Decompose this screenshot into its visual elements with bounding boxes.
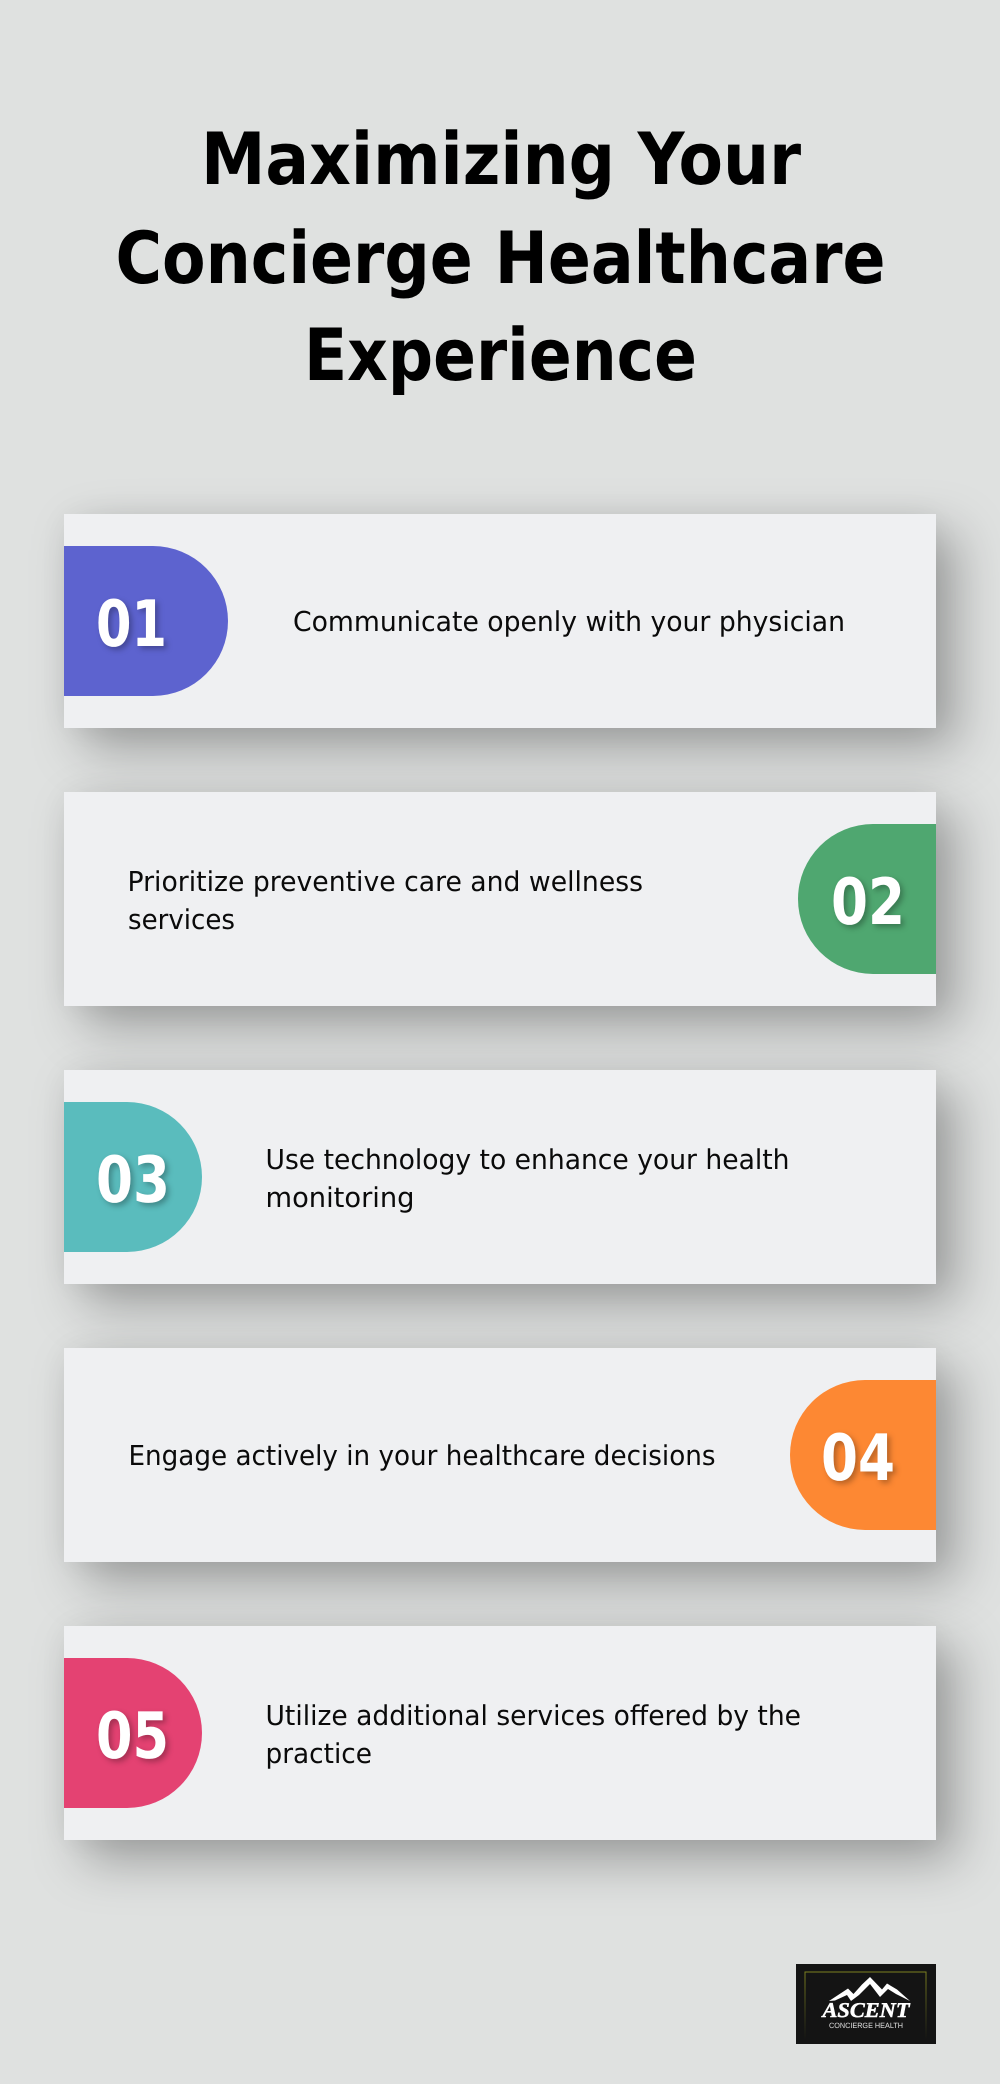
text 05: practice	[266, 1739, 372, 1770]
number 02: 02	[831, 866, 905, 940]
title	[116, 117, 886, 397]
panel: step 04	[64, 1348, 936, 1562]
badge 05	[64, 1658, 202, 1808]
text 02: services	[128, 905, 235, 936]
number 04: 04	[821, 1422, 895, 1496]
text 03: Use technology to enhance your health	[266, 1145, 790, 1176]
card 02	[64, 792, 936, 1006]
title: Maximizing Your	[201, 117, 801, 201]
icon: mountains	[829, 1977, 910, 2001]
title: Concierge Healthcare	[116, 216, 886, 300]
badge 04	[790, 1380, 936, 1530]
card 03	[64, 1070, 936, 1284]
badge 02	[798, 824, 936, 974]
card 01	[64, 514, 936, 728]
tagline: CONCIERGE HEALTH	[829, 2021, 903, 2030]
number 03: 03	[96, 1144, 170, 1218]
text 03: monitoring	[266, 1183, 414, 1214]
text 05: Utilize additional services offered by the	[266, 1701, 801, 1732]
logo: Ascent Concierge Health	[796, 1964, 936, 2044]
panel: step 03	[64, 1070, 936, 1284]
badge 03	[64, 1102, 202, 1252]
number 05: 05	[96, 1700, 169, 1774]
number 01: 01	[96, 588, 167, 662]
text 02	[128, 867, 643, 936]
text 01: Communicate openly with your physician	[293, 607, 845, 638]
panel: step 02	[64, 792, 936, 1006]
text 03	[266, 1145, 790, 1214]
text 04: Engage actively in your healthcare decisions	[128, 1441, 716, 1472]
title: Experience	[304, 313, 697, 397]
panel: step 05	[64, 1626, 936, 1840]
card 04	[64, 1348, 936, 1562]
panel: step 01	[64, 514, 936, 728]
card 05	[64, 1626, 936, 1840]
wordmark: ASCENT	[820, 1998, 911, 2022]
text 05	[266, 1701, 801, 1770]
text 02: Prioritize preventive care and wellness	[128, 867, 643, 898]
badge 01	[64, 546, 228, 696]
